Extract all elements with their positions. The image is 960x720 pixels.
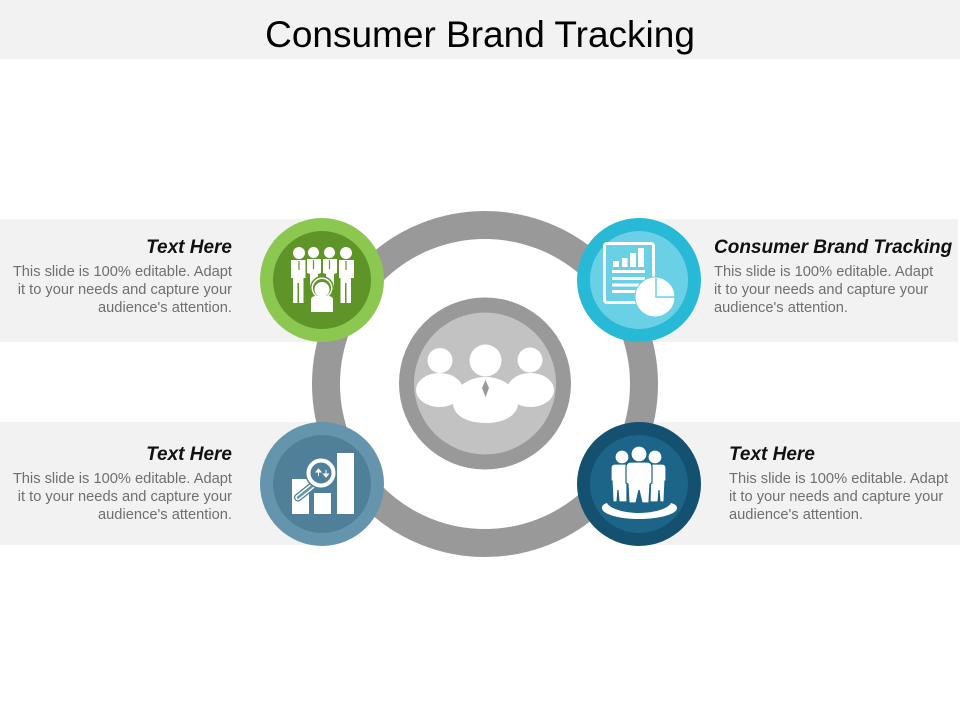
title bar	[0, 0, 960, 59]
band: bottom right	[639, 422, 960, 545]
band: top left	[0, 219, 322, 342]
band: bottom left	[0, 422, 322, 545]
icon: group on platform	[611, 446, 666, 503]
text block: top right: This slide is 100% editable. Adapt	[714, 264, 933, 280]
circle: green team	[260, 218, 384, 342]
title: Consumer Brand Tracking	[265, 14, 695, 55]
text block: bottom right	[729, 444, 948, 523]
text block: top left: This slide is 100% editable. Adapt	[13, 264, 232, 280]
text block: bottom left: it to your needs and capture your	[18, 489, 232, 505]
big grey ring	[326, 225, 644, 543]
text block: bottom left: audience's attention.	[98, 507, 232, 523]
text block: bottom left	[13, 444, 232, 523]
text block: bottom right: This slide is 100% editable. Adapt	[729, 471, 948, 487]
circle: steel blue analytics	[260, 422, 384, 546]
text block: bottom right: Text Here	[729, 444, 815, 465]
text block: top left: Text Here	[146, 237, 232, 258]
icon: bars with magnifier	[292, 453, 354, 514]
icon: document with pie chart	[604, 244, 675, 317]
text block: top left	[13, 237, 232, 316]
text block: top right: audience's attention.	[714, 300, 848, 316]
text block: bottom left: This slide is 100% editable. Adapt	[13, 471, 232, 487]
text block: top right: Consumer Brand Tracking	[714, 237, 952, 258]
text block: bottom left: Text Here	[146, 444, 232, 465]
text block: bottom right: it to your needs and capture your	[729, 489, 943, 505]
text block: top left: it to your needs and capture your	[18, 282, 232, 298]
band: top right	[639, 219, 958, 342]
text block: bottom right: audience's attention.	[729, 507, 863, 523]
text block: top left: audience's attention.	[98, 300, 232, 316]
circle: dark blue group	[577, 422, 701, 546]
text block: top right	[714, 237, 952, 316]
text block: top right: it to your needs and capture your	[714, 282, 928, 298]
center hub	[399, 298, 571, 470]
circle: cyan report	[577, 218, 701, 342]
icon: three people	[416, 344, 554, 423]
icon: team and presenter	[291, 247, 354, 312]
